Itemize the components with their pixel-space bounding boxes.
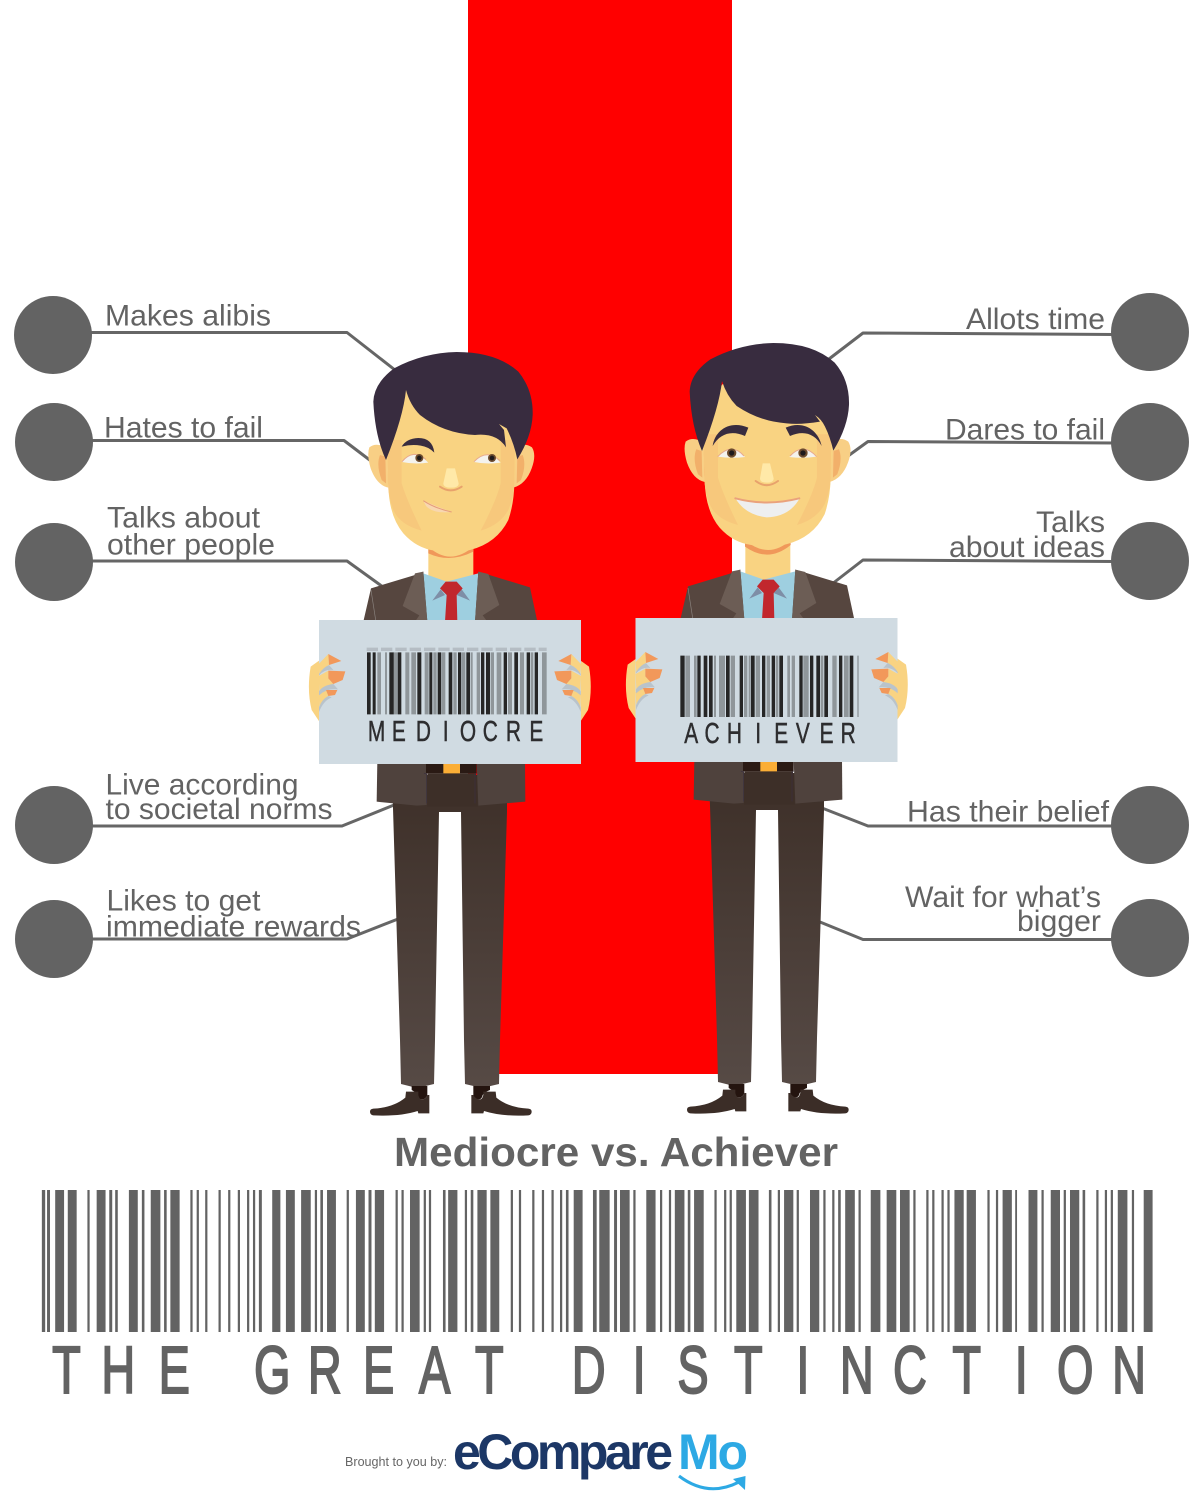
sign: achiever barcode: I [755,718,761,750]
barcode title: I [1015,1334,1028,1408]
callout: Allots time: Allots time [966,303,1105,336]
callout: Dares to fail: Dares to fail [945,414,1105,446]
logo: eCompareMo: eCompare [453,1424,673,1480]
mediocre face [402,438,501,512]
barcode title: T [475,1334,504,1408]
callout: Likes to get immediate rewards: immediate rewards [106,910,361,944]
callout: Talks about other people: other people [107,528,275,562]
sign: mediocre barcode: I [443,716,449,748]
callout: Live according to societal norms: to societal norms [106,793,332,826]
callout: Makes alibis: Makes alibis [105,300,271,332]
callout: Wait for what's bigger: Wait for what’s [905,881,1101,914]
achiever hair [690,343,849,451]
sign: mediocre barcode [319,620,581,764]
barcode title: I [633,1334,646,1408]
barcode title: H [101,1334,135,1408]
barcode title: E [159,1334,190,1408]
sign: mediocre barcode: E [529,716,543,748]
barcode title: A [419,1334,451,1408]
barcode title: D [572,1334,606,1408]
hands: mediocre man [319,654,581,712]
sign: achiever barcode: E [820,718,834,750]
barcode title: T [952,1334,981,1408]
mediocre hair [373,352,533,460]
red background column [468,0,732,1074]
callout: Allots time [829,293,1189,371]
callout: Talks about other people [15,502,383,601]
sign: mediocre barcode: R [506,716,521,748]
barcode title: T [734,1334,763,1408]
callout: Talks about ideas [832,506,1189,600]
sign: mediocre barcode: D [416,716,431,748]
sign barcode bars [680,656,859,717]
barcode title: E [363,1334,394,1408]
callout: Hates to fail: Hates to fail [104,412,263,444]
heading: Mediocre vs. Achiever [394,1129,838,1175]
callout: Makes alibis [14,296,395,374]
sign: achiever barcode: R [841,718,856,750]
barcode title: N [840,1334,874,1408]
barcode title: G [254,1334,291,1408]
barcode title: T [52,1334,81,1408]
callout: Live according to societal norms: Live according [106,768,298,802]
barcode title: I [796,1334,809,1408]
callout: Dares to fail [848,403,1189,481]
hands: achiever man [636,652,898,710]
barcode title: S [677,1334,709,1408]
callout: Live according to societal norms [15,768,394,864]
callout: Has their belief [822,786,1189,864]
sign: achiever barcode [636,618,898,762]
callout: Talks about other people: Talks about [107,502,261,534]
sign: mediocre barcode: C [483,716,498,748]
callout: Likes to get immediate rewards [15,884,398,978]
credit line: Brought to you by: [345,1455,447,1469]
sign: mediocre barcode: M [368,716,385,748]
callout: Wait for what's bigger: bigger [1017,905,1101,938]
callout: Hates to fail [15,403,371,481]
sign: achiever barcode: C [705,718,720,750]
sign: mediocre barcode: E [392,716,406,748]
barcode title: C [893,1334,927,1408]
sign: achiever barcode: V [796,718,810,750]
sign barcode bars [367,652,547,714]
sign: achiever barcode: H [727,718,742,750]
logo: eCompareMo [453,1424,748,1490]
callout: Talks about ideas: about ideas [949,531,1105,564]
barcode title: O [1057,1334,1093,1408]
sign: achiever barcode: A [684,718,698,750]
callout: Has their belief: Has their belief [907,796,1110,828]
callout: Likes to get immediate rewards: Likes to get [106,884,261,918]
sign: achiever barcode: E [774,718,788,750]
achiever face [713,425,822,517]
figure: mediocre man [309,352,591,1116]
large barcode [42,1190,1153,1332]
barcode title: N [1112,1334,1146,1408]
sign: mediocre barcode: O [460,716,476,748]
callout: Wait for what's bigger [820,881,1189,977]
figure: achiever man [626,343,908,1114]
logo: eCompareMo: Mo [678,1424,748,1480]
barcode title: R [308,1334,342,1408]
callout: Talks about ideas: Talks [1036,506,1105,539]
